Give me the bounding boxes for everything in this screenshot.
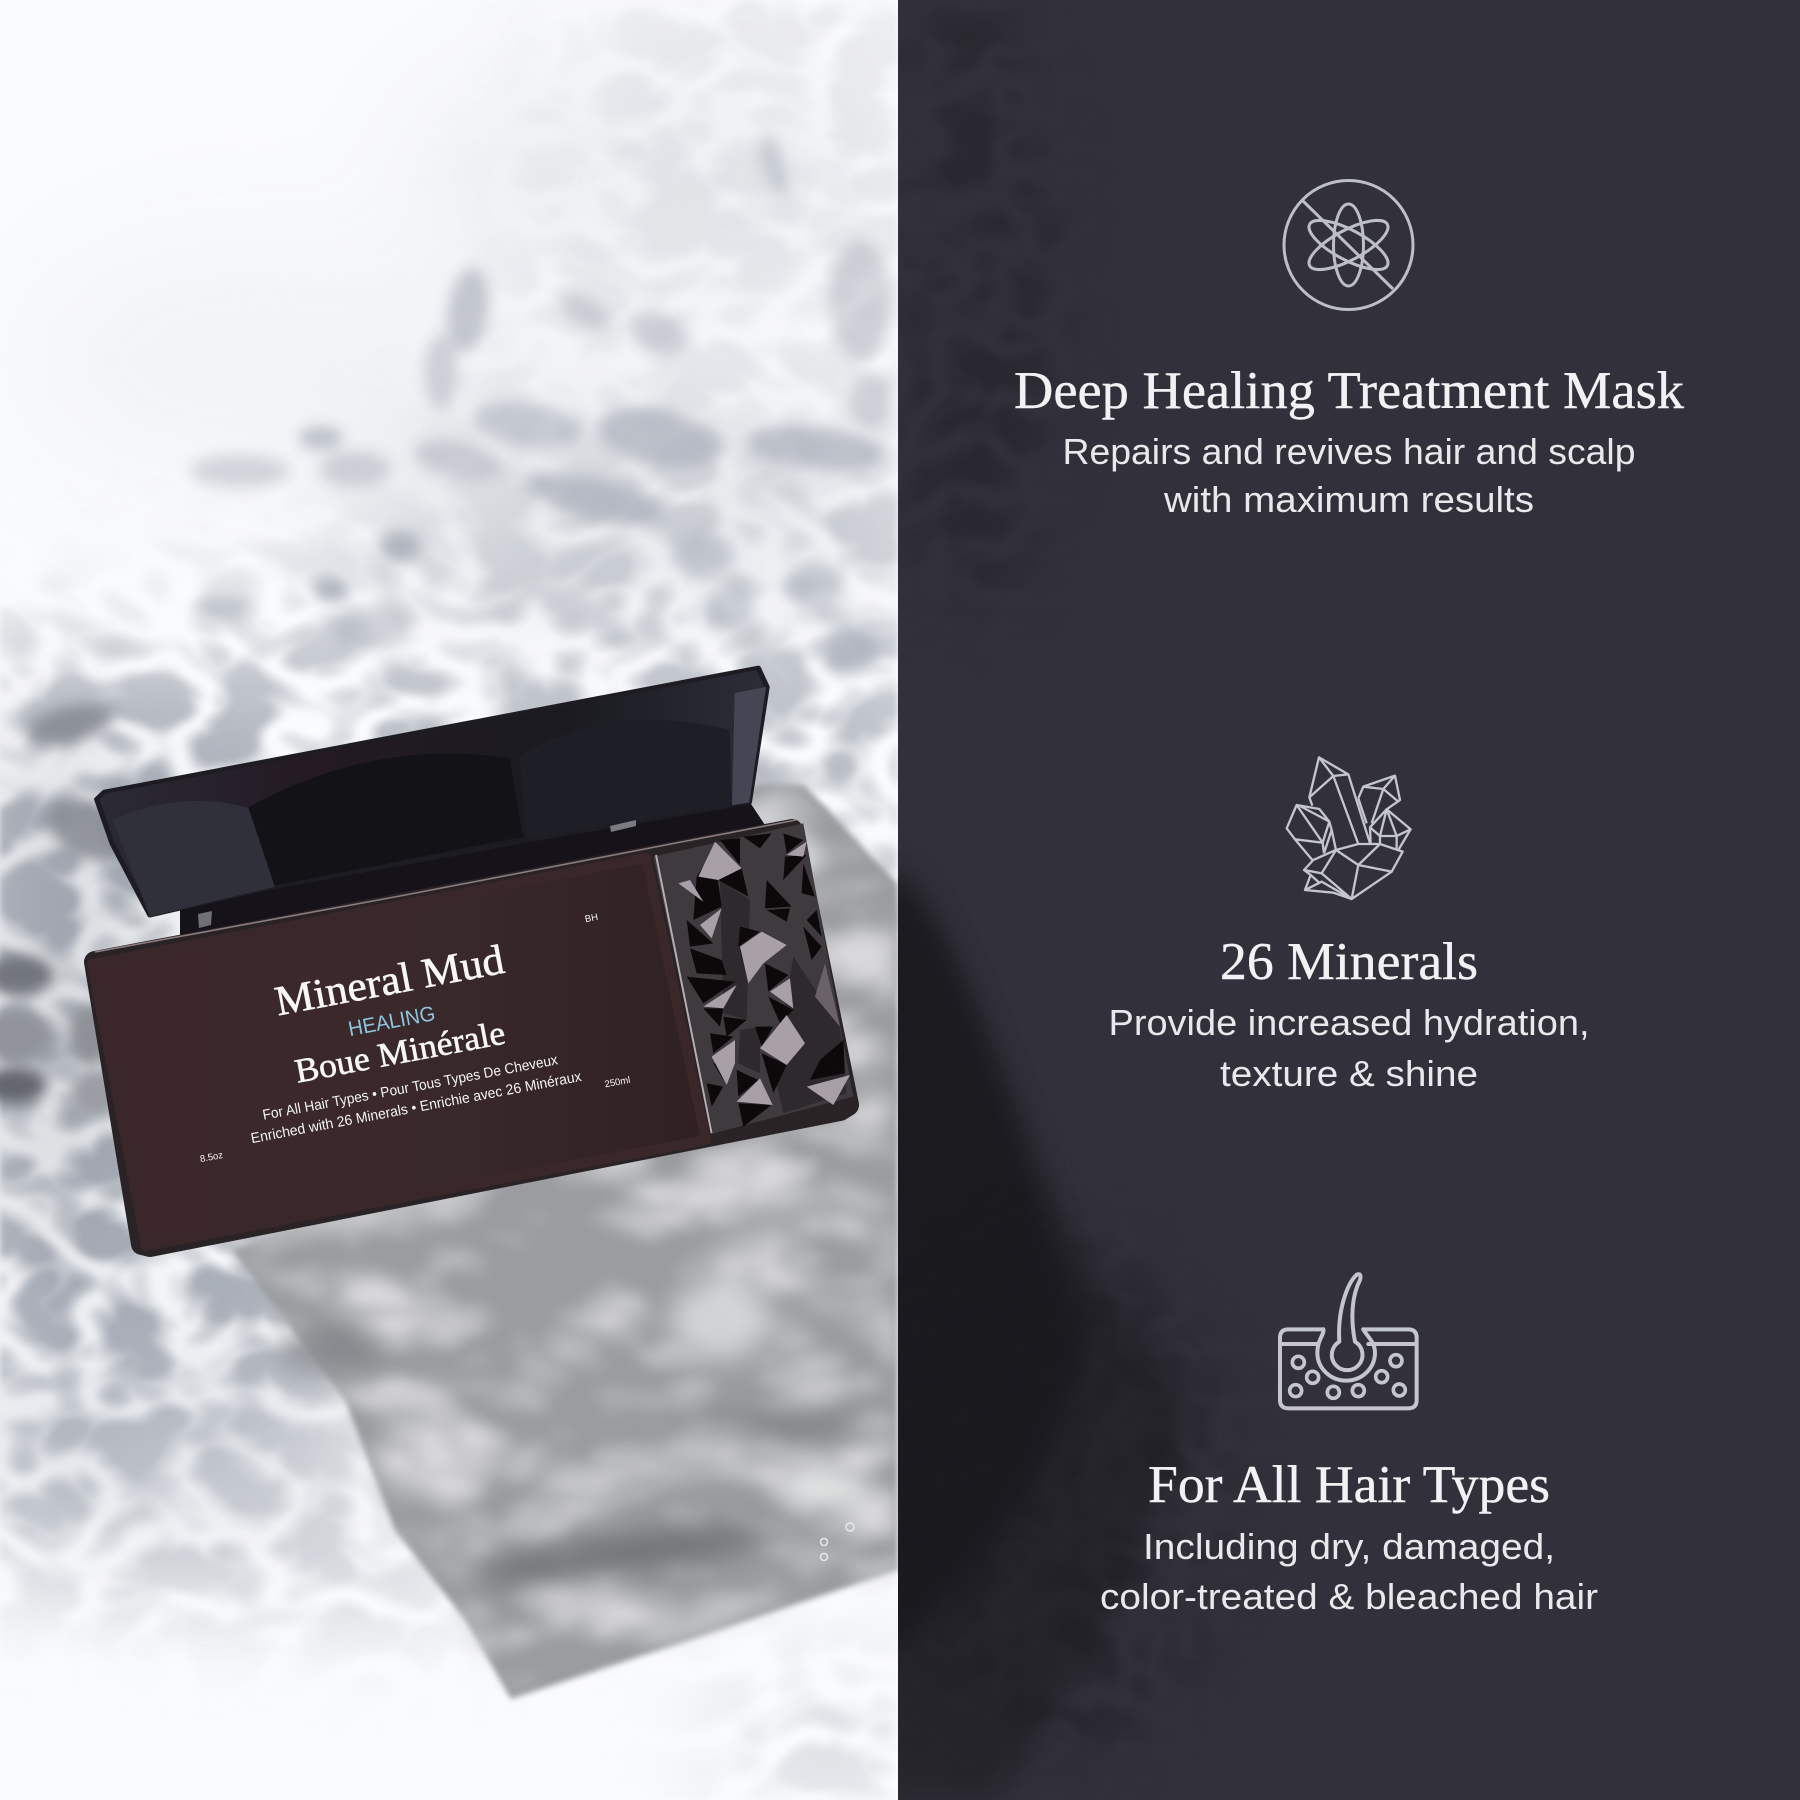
text: hair types description: color-treated & bleached hair xyxy=(1100,1576,1598,1617)
label text: HEALING xyxy=(346,1002,437,1041)
label text: Boue Minérale xyxy=(292,1015,508,1091)
label text: For All Hair Types • Pour Tous Types De Cheveux xyxy=(261,1052,560,1124)
jar body xyxy=(95,830,848,1246)
jar shadow on water xyxy=(200,760,900,1720)
water droplets xyxy=(820,1523,854,1560)
label text: 250ml xyxy=(604,1075,631,1090)
text: hair types description: Including dry, damaged, xyxy=(1143,1526,1555,1567)
jar lid xyxy=(97,668,767,917)
jar front label xyxy=(92,858,706,1246)
text: deep healing description: with maximum results xyxy=(1163,479,1534,520)
heading: deep healing: Deep Healing Treatment Mask xyxy=(1014,362,1685,420)
text: deep healing description xyxy=(1062,431,1636,520)
jar shadow on dark panel xyxy=(880,872,1191,1800)
panel: water photo background xyxy=(0,0,900,1800)
label text: Enriched with 26 Minerals • Enrichie avec 26 Minéraux xyxy=(250,1069,584,1147)
text: hair types description xyxy=(1100,1526,1598,1617)
icon: crystals xyxy=(1287,757,1411,899)
text: minerals description: texture & shine xyxy=(1220,1053,1478,1094)
icon: hair follicle xyxy=(1280,1274,1417,1408)
top gloss edge xyxy=(95,820,796,952)
light water cells xyxy=(0,131,892,1119)
dark water ripples xyxy=(918,22,1198,1736)
faceted side panel xyxy=(653,823,853,1133)
heading: all hair types: For All Hair Types xyxy=(1148,1456,1550,1514)
label text: Mineral Mud xyxy=(271,937,508,1025)
product jar xyxy=(92,668,853,1246)
text: minerals description: Provide increased hydration, xyxy=(1108,1002,1590,1043)
label text xyxy=(199,912,631,1165)
jar neck xyxy=(180,795,765,945)
icon: no chemicals atom xyxy=(1284,180,1413,310)
text: minerals description xyxy=(1108,1002,1590,1094)
text: deep healing description: Repairs and revives hair and scalp xyxy=(1062,431,1636,472)
heading: 26 minerals: 26 Minerals xyxy=(1220,933,1478,991)
label text: 8.5oz xyxy=(199,1150,224,1165)
neck highlights xyxy=(198,911,212,928)
label text: BH xyxy=(584,912,599,925)
panel: dark information column xyxy=(880,0,1800,1800)
